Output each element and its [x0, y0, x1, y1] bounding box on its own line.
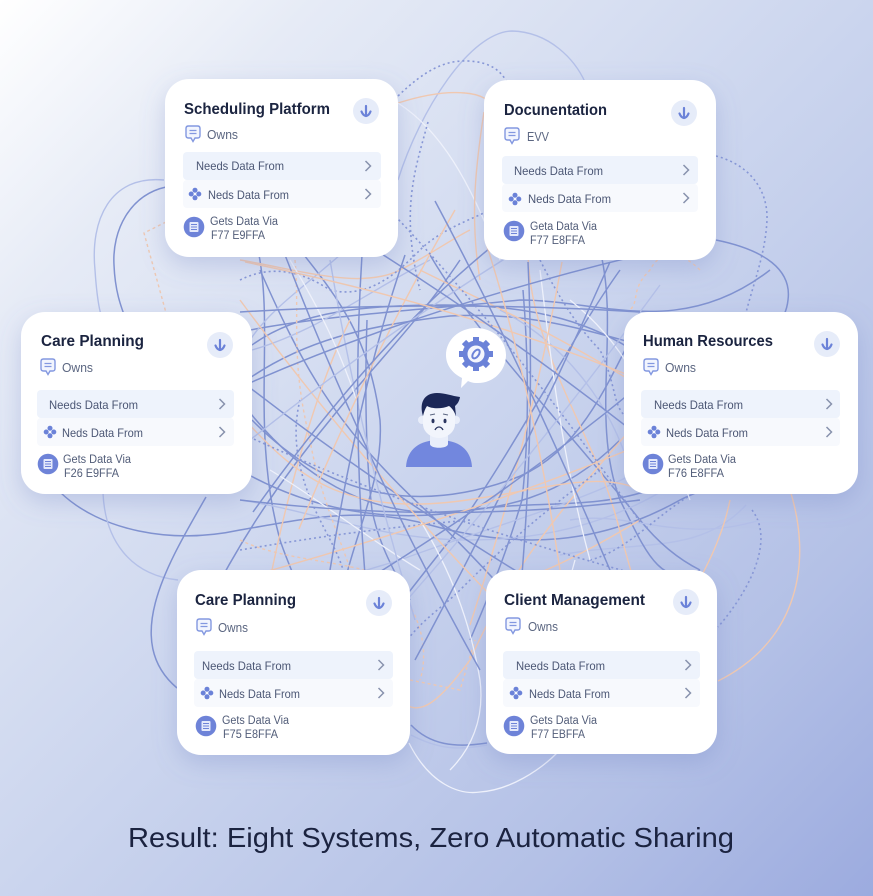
card: Care Planning left [21, 312, 252, 494]
tangled data connections [61, 31, 800, 792]
row: needs data [37, 390, 234, 418]
ring around the person [252, 305, 660, 370]
gets data label [530, 221, 598, 247]
row: needs data: Needs Data From [654, 398, 743, 412]
row: needs data: Needs Data From [516, 659, 605, 673]
row: needs data: Needs Data From [202, 659, 291, 673]
row: needs data [194, 651, 393, 679]
gets data label: Gets Data Via [210, 216, 279, 228]
card: Care Planning bottom [177, 570, 410, 755]
row: neds data: Neds Data From [528, 192, 611, 206]
person [406, 393, 472, 467]
icon: document [504, 221, 524, 241]
owns label: EVV [527, 130, 550, 144]
row: neds data: Neds Data From [666, 426, 748, 440]
owns label: Owns [207, 128, 238, 142]
gets data label [63, 454, 132, 480]
card: Scheduling Platform [165, 79, 398, 257]
row: neds data: Neds Data From [529, 687, 610, 701]
gets data label: Gets Data Via [222, 715, 290, 727]
icon: owns [644, 359, 658, 374]
icon: download [673, 589, 699, 615]
row: neds data [503, 679, 700, 707]
row: neds data: Neds Data From [208, 188, 289, 202]
row: needs data [503, 651, 700, 679]
row: needs data: Needs Data From [196, 159, 284, 173]
gets data label: F77 EBFFA [531, 729, 585, 741]
row: neds data [37, 418, 234, 446]
gets data label: Gets Data Via [530, 715, 598, 727]
gets data label: F26 E9FFA [64, 468, 119, 480]
row: neds data: Neds Data From [219, 687, 300, 701]
card: Documentation [484, 80, 716, 260]
icon: download [366, 590, 392, 616]
row: neds data [194, 679, 393, 707]
gets data label: F76 E8FFA [668, 468, 724, 480]
icon: owns [41, 359, 55, 374]
gets data label: Geta Data Via [530, 221, 598, 233]
icon: download [671, 100, 697, 126]
gets data label [222, 715, 290, 741]
gets data label: Gets Data Via [668, 454, 737, 466]
row: needs data: Needs Data From [514, 164, 603, 178]
heading: Docunentation [504, 102, 607, 119]
gets data label: F77 E8FFA [530, 235, 585, 247]
icon: document [184, 217, 204, 237]
gets data label: Gets Data Via [63, 454, 132, 466]
row: neds data [502, 184, 698, 212]
icon: owns [197, 619, 211, 634]
row: needs data [183, 152, 381, 180]
heading: Care Planning [195, 592, 296, 609]
owns label: Owns [218, 621, 248, 635]
icon: owns [505, 128, 519, 144]
icon: download [207, 332, 233, 358]
gets data label [530, 715, 598, 741]
card: Human Resources [624, 312, 858, 494]
gets data label [668, 454, 737, 480]
icon: document [196, 716, 216, 736]
heading: Human Resources [643, 333, 773, 350]
row: needs data: Needs Data From [49, 398, 138, 412]
heading: Care Planning [41, 333, 144, 350]
row: needs data [641, 390, 840, 418]
speech bubble with gear [446, 328, 506, 388]
icon: document [504, 716, 524, 736]
icon: download [353, 98, 379, 124]
icon: document [643, 454, 663, 474]
owns label: Owns [528, 620, 558, 634]
card: Client Management [486, 570, 717, 754]
person with speech bubble [406, 328, 506, 467]
icon: document [38, 454, 58, 474]
heading: Scheduling Platform [184, 101, 330, 118]
gets data label: F77 E9FFA [211, 230, 265, 242]
icon: download [814, 331, 840, 357]
icon: owns [186, 126, 200, 142]
row: neds data: Neds Data From [62, 426, 143, 440]
icon: owns [506, 618, 520, 634]
owns label: Owns [62, 361, 93, 375]
row: neds data [183, 180, 381, 208]
heading: Client Management [504, 592, 646, 609]
row: neds data [641, 418, 840, 446]
gets data label [210, 216, 279, 242]
row: needs data [502, 156, 698, 184]
owns label: Owns [665, 361, 696, 375]
gets data label: F75 E8FFA [223, 729, 278, 741]
title: Result: Eight Systems, Zero Automatic Sharing [128, 822, 734, 853]
